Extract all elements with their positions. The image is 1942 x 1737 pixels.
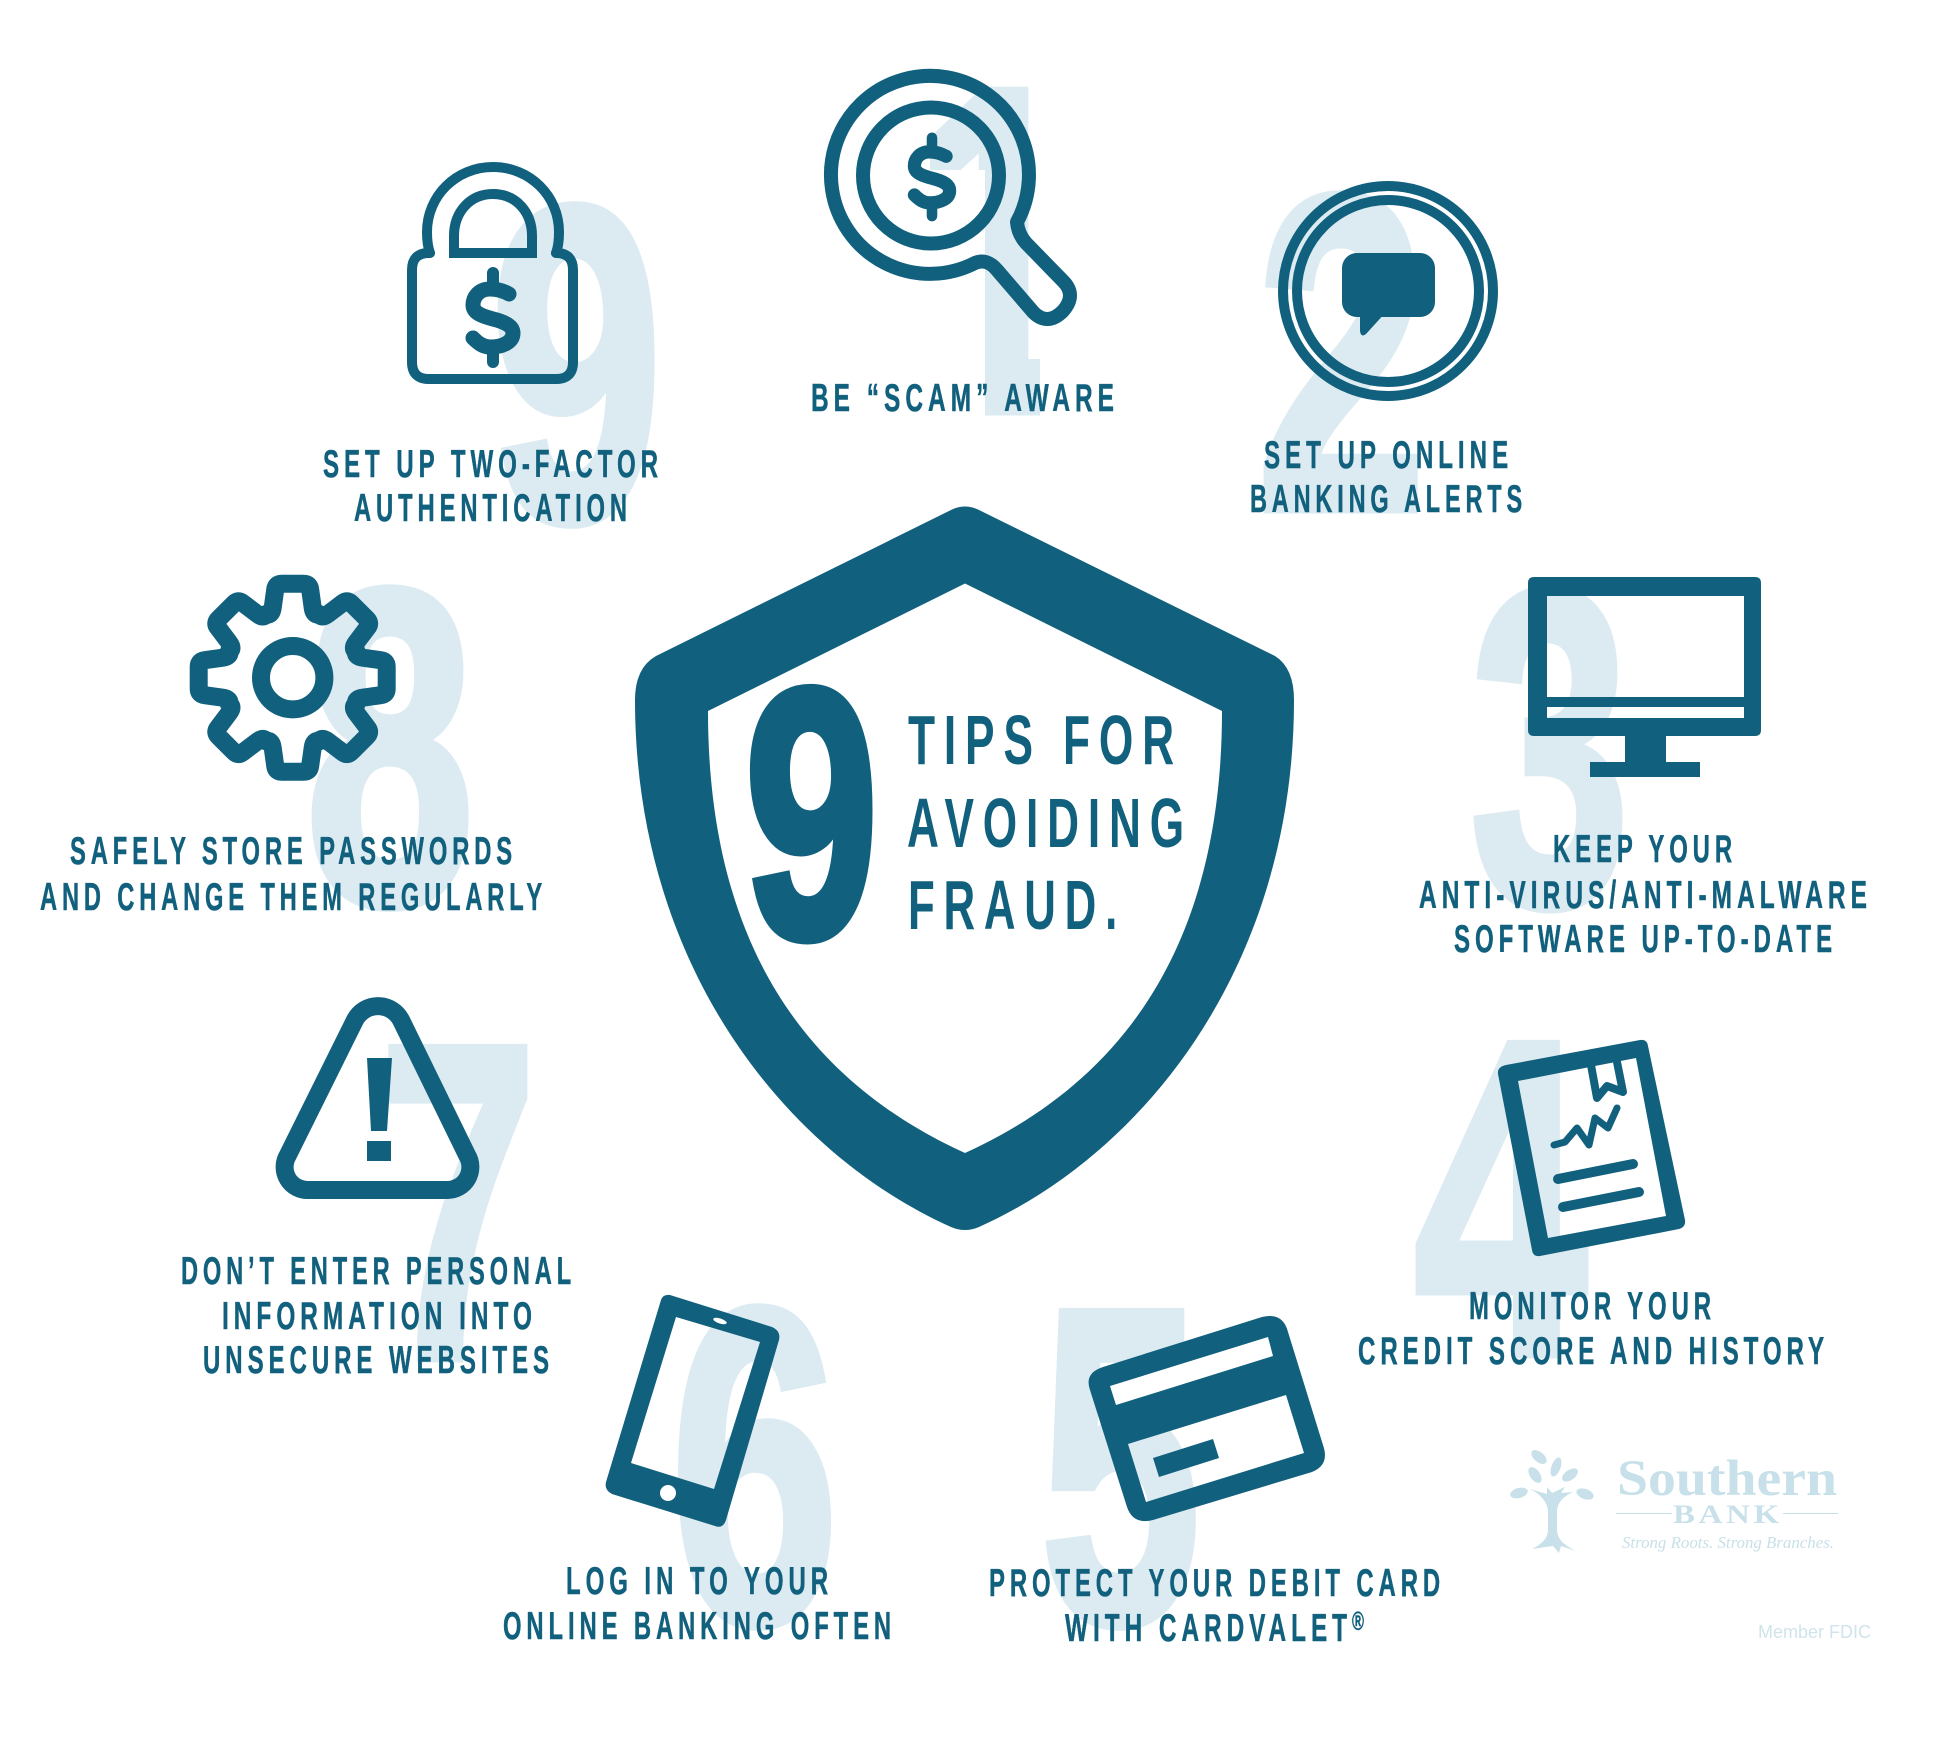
panel: tip 5 debit card [989,1216,1445,1718]
label: BE “SCAM” AWARE [811,377,1119,420]
big number 5: 5 [1040,1216,1201,1718]
panel: tip 2 online banking alerts [1250,103,1527,605]
panel: tip 6 online banking [503,1216,896,1718]
icon: magnifier with dollar [831,76,1070,319]
logo: Southern Bank: BANK [1673,1500,1783,1529]
big number 4: 4 [1414,948,1589,1450]
icon: speech bubble in circle [1283,186,1493,396]
icon: tree [1509,1447,1595,1553]
panel: tip 6 online banking: ONLINE BANKING OFTEN [503,1605,896,1648]
panel: tip 1 be scam aware [811,0,1119,510]
title: TIPS FOR [908,701,1183,779]
icon: credit report document [1498,1040,1685,1256]
label: SET UP TWO-FACTOR [323,443,663,486]
wordmark: Southern [1617,1451,1837,1507]
label: PROTECT YOUR DEBIT CARD [989,1562,1445,1605]
member FDIC note: Member FDIC [1758,1622,1871,1642]
big number 9: 9 [490,114,663,616]
title: AVOIDING [907,784,1193,862]
label: MONITOR YOUR [1469,1285,1716,1328]
panel: tip 2 online banking alerts: BANKING ALERTS [1250,478,1527,521]
panel: tip 8 passwords: AND CHANGE THEM REGULARLY [40,876,547,919]
panel: tip 9 two-factor: AUTHENTICATION [354,487,632,530]
shield outline [635,506,1294,1230]
label: LOG IN TO YOUR [566,1560,833,1603]
panel: tip 7 unsecure websites [181,952,576,1454]
logo: Southern Bank [1509,1447,1838,1553]
big number 6: 6 [670,1216,839,1718]
panel: tip 4 credit score [1358,948,1829,1450]
label: SAFELY STORE PASSWORDS [70,830,517,873]
label: DON’T ENTER PERSONAL [181,1250,576,1293]
icon: monitor [1528,577,1761,777]
panel: central shield [635,506,1294,1230]
panel: tip 9 two-factor [323,114,663,616]
panel: tip 5 debit card: WITH CARDVALET [1065,1607,1525,1650]
icon: debit card [1089,1316,1325,1521]
big number 2: 2 [1256,103,1427,605]
panel: tip 5 debit card: ® [1352,1606,1369,1636]
icon: smartphone [606,1295,779,1527]
title [907,701,1193,944]
icon: gear [199,584,387,772]
panel: tip 7 unsecure websites: INFORMATION INTO [222,1295,537,1338]
icon: warning triangle [285,1006,470,1190]
tagline: Strong Roots. Strong Branches. [1622,1533,1834,1552]
label: SET UP ONLINE [1264,434,1513,477]
panel: tip 3 anti-virus [1419,498,1872,1000]
big number 8: 8 [305,497,475,999]
label: KEEP YOUR [1553,828,1737,871]
title: FRAUD. [908,866,1126,944]
panel: tip 8 passwords [40,497,547,999]
large number nine: 9 [745,617,878,1012]
big number 7: 7 [379,952,537,1454]
icon: padlock with dollar [412,167,573,379]
big number 3: 3 [1470,498,1630,1000]
big number 1: 1 [908,0,1084,510]
panel: tip 7 unsecure websites: UNSECURE WEBSITES [203,1339,554,1382]
